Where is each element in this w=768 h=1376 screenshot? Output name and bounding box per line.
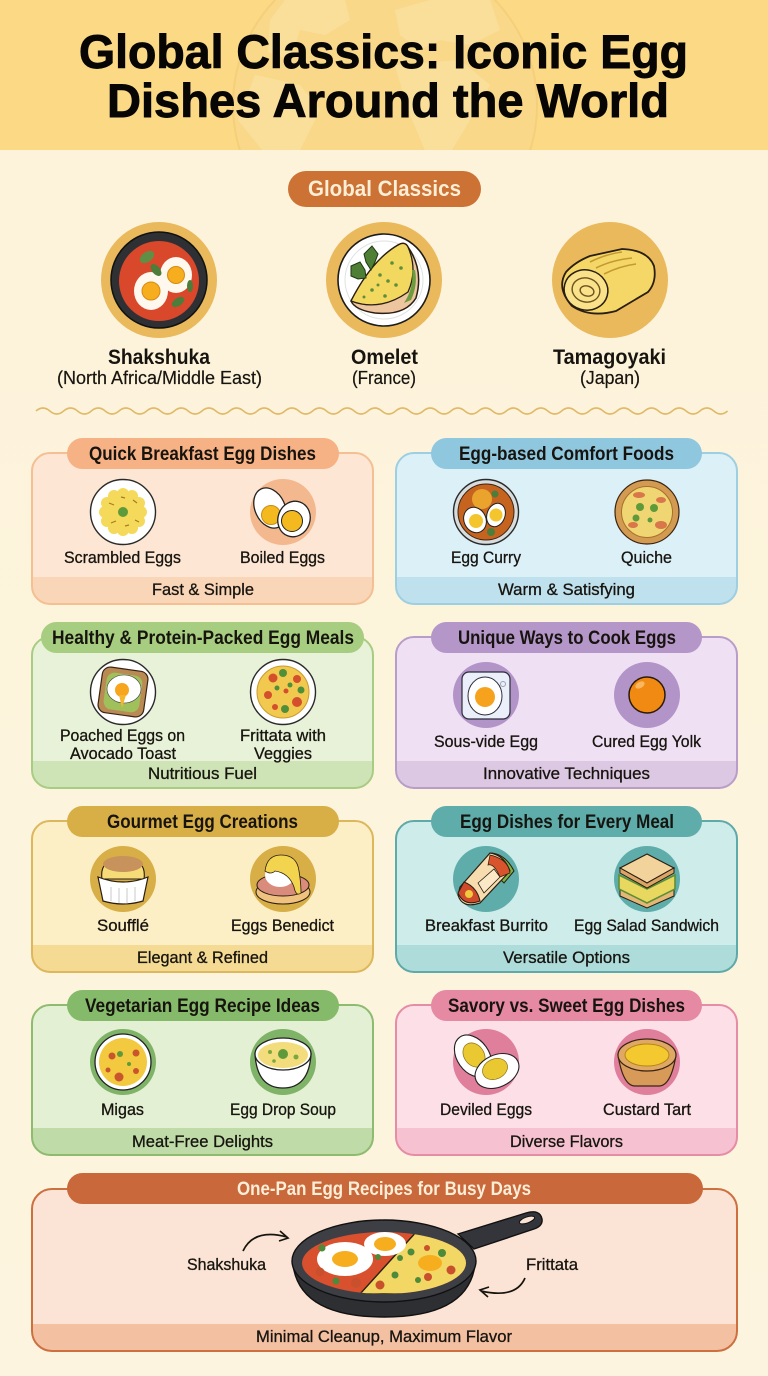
label: Omelet <box>351 346 418 369</box>
section pill: Global Classics <box>288 171 481 207</box>
footer: Versatile Options <box>503 948 630 967</box>
heading: Unique Ways to Cook Eggs <box>458 627 676 649</box>
panel: Gourmet Egg Creations <box>32 806 373 972</box>
icon: custard tart <box>614 1029 680 1095</box>
heading <box>41 622 364 653</box>
panel: Gourmet Egg Creations: Eggs Benedict <box>231 916 334 935</box>
heading <box>431 806 702 837</box>
heading <box>431 990 702 1021</box>
footer: Fast & Simple <box>152 580 254 599</box>
footer: Warm & Satisfying <box>498 580 635 599</box>
heading <box>431 438 702 469</box>
footer: Meat-Free Delights <box>132 1132 273 1151</box>
globe watermark <box>232 0 538 150</box>
dish labels: Soufflé <box>97 916 149 935</box>
icon: eggs benedict <box>250 846 316 912</box>
panel: Healthy & Protein-Packed Egg Meals <box>32 622 373 788</box>
classic dish: Shakshuka <box>57 222 262 388</box>
section pill: Global Classics: Global Classics <box>308 176 461 201</box>
panel: Savory vs. Sweet Egg Dishes: Custard Tart <box>603 1100 691 1119</box>
panel: One-Pan Egg Recipes for Busy Days <box>32 1173 737 1351</box>
footer: Elegant & Refined <box>137 948 268 967</box>
label: Tamagoyaki <box>553 346 666 369</box>
icon: scrambled eggs <box>90 480 156 544</box>
label: Frittata with arrow: Frittata <box>526 1255 579 1274</box>
icon: egg curry <box>454 480 518 544</box>
icon: souffle <box>90 846 156 912</box>
label: Shakshuka <box>108 346 210 369</box>
classic dish: Tamagoyaki: (Japan) <box>580 368 640 388</box>
panel: Vegetarian Egg Recipe Ideas <box>32 990 373 1155</box>
icon: quiche <box>615 480 679 544</box>
dish labels: Egg Curry <box>451 548 521 567</box>
classic dish: Shakshuka: (North Africa/Middle East) <box>57 368 262 388</box>
panel: Healthy & Protein-Packed Egg Meals: Veggies <box>254 744 312 763</box>
icon: breakfast burrito <box>453 846 519 912</box>
panel: Egg Dishes for Every Meal: Egg Salad Sandwich <box>574 916 719 935</box>
label: Shakshuka with arrow <box>187 1231 288 1274</box>
dish labels: Scrambled Eggs <box>64 548 181 567</box>
panel: Egg Dishes for Every Meal <box>396 806 737 972</box>
icon: avocado toast <box>90 660 156 724</box>
icon: migas <box>90 1029 156 1095</box>
dish labels: Deviled Eggs <box>440 1100 532 1119</box>
heading <box>67 990 339 1021</box>
heading <box>67 438 339 469</box>
footer: Minimal Cleanup, Maximum Flavor <box>256 1327 512 1346</box>
heading: Gourmet Egg Creations <box>107 811 298 833</box>
header banner <box>0 0 768 150</box>
panel: Egg-based Comfort Foods <box>396 438 737 604</box>
heading <box>431 622 702 653</box>
panel: Unique Ways to Cook Eggs <box>396 622 737 788</box>
classic dish: Omelet <box>326 222 442 388</box>
heading <box>67 806 339 837</box>
icon: deviled eggs <box>447 1028 525 1095</box>
heading: Healthy & Protein-Packed Egg Meals <box>52 627 354 649</box>
icon: egg salad sandwich <box>614 846 680 912</box>
label: Shakshuka with arrow: Shakshuka <box>187 1255 266 1274</box>
panel: Egg-based Comfort Foods: Quiche <box>621 548 672 567</box>
title <box>79 25 688 127</box>
panel: Savory vs. Sweet Egg Dishes <box>396 990 737 1155</box>
panel: Healthy & Protein-Packed Egg Meals: Avocado Toast <box>70 744 176 763</box>
icon: boiled eggs <box>248 479 316 545</box>
dish labels: Breakfast Burrito <box>425 916 548 935</box>
icon: sous-vide egg <box>453 662 519 728</box>
heading: Savory vs. Sweet Egg Dishes <box>448 995 685 1017</box>
classic dish: Tamagoyaki <box>552 222 668 388</box>
icon: frittata <box>250 660 316 724</box>
heading <box>67 1173 703 1204</box>
icon: cured egg yolk <box>614 662 680 728</box>
label: Frittata with arrow <box>480 1255 579 1297</box>
heading: Quick Breakfast Egg Dishes <box>89 443 316 465</box>
heading: Egg Dishes for Every Meal <box>460 811 674 833</box>
footer: Innovative Techniques <box>483 764 650 783</box>
panel: Quick Breakfast Egg Dishes <box>32 438 373 604</box>
footer: Diverse Flavors <box>510 1132 623 1151</box>
panel: Healthy & Protein-Packed Egg Meals: Frittata with <box>240 726 326 745</box>
footer: Nutritious Fuel <box>148 764 257 783</box>
dish labels: Sous-vide Egg <box>434 732 538 751</box>
classic dish: Omelet: (France) <box>352 368 416 388</box>
panel: Vegetarian Egg Recipe Ideas: Egg Drop Soup <box>230 1100 336 1119</box>
panel: Quick Breakfast Egg Dishes: Boiled Eggs <box>240 548 325 567</box>
icon: egg drop soup <box>250 1029 316 1095</box>
icon: skillet <box>292 1212 542 1317</box>
panel: Unique Ways to Cook Eggs: Cured Egg Yolk <box>592 732 701 751</box>
dish labels: Poached Eggs on <box>60 726 185 745</box>
title: Dishes Around the World <box>107 74 669 127</box>
heading: Egg-based Comfort Foods <box>459 443 674 465</box>
title: Global Classics: Iconic Egg <box>79 25 688 78</box>
heading: Vegetarian Egg Recipe Ideas <box>85 995 320 1017</box>
dish labels: Migas <box>101 1100 144 1119</box>
heading: One-Pan Egg Recipes for Busy Days <box>237 1178 531 1200</box>
